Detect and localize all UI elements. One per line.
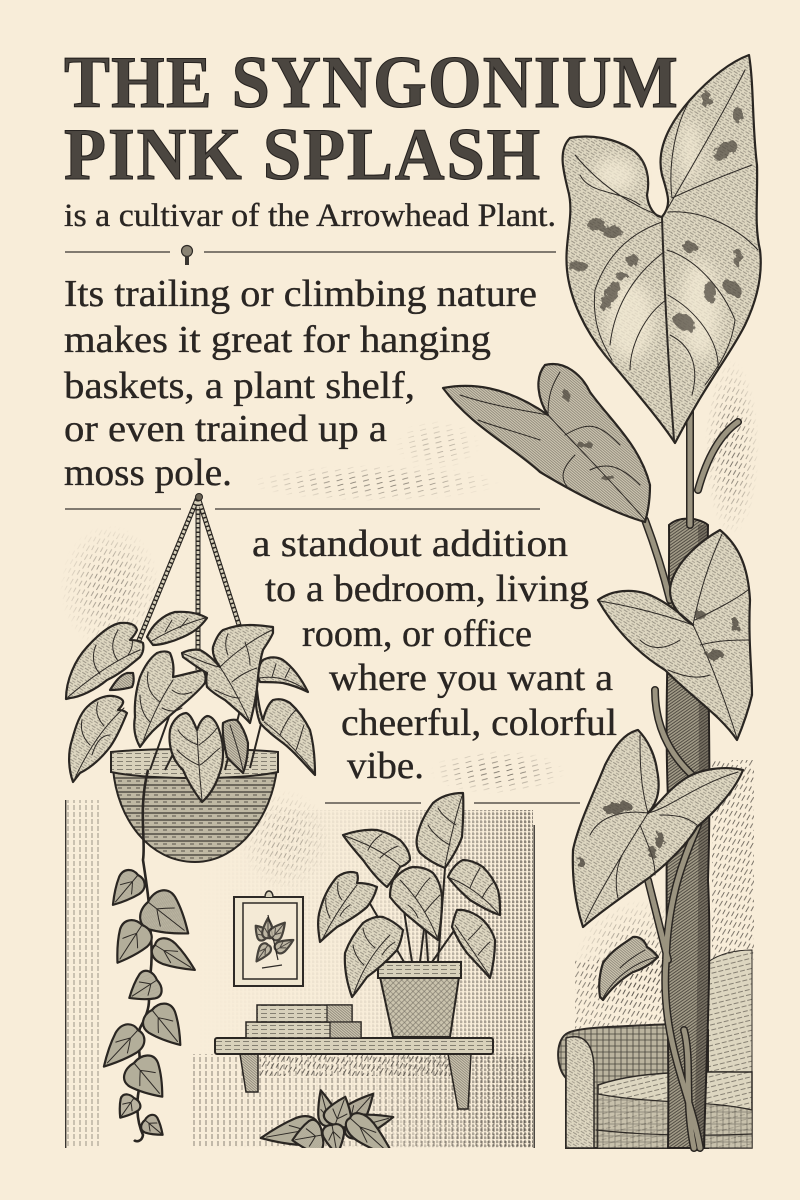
potted plant	[318, 793, 500, 1037]
title: THE SYNGONIUM	[64, 42, 678, 124]
leaf	[110, 673, 134, 690]
wall shelf	[215, 1038, 493, 1109]
potted plant leaves	[318, 793, 500, 997]
leaf	[417, 793, 463, 868]
leaf	[452, 910, 495, 978]
leaf	[134, 652, 206, 747]
stems	[365, 868, 458, 962]
main stem and vines	[645, 410, 738, 1148]
leaf: top large	[563, 55, 761, 443]
pale highlights	[593, 120, 720, 360]
text block: growing habit: or even trained up a	[64, 408, 387, 450]
title: PINK SPLASH	[64, 114, 540, 196]
leaf	[69, 696, 127, 782]
leaf	[256, 690, 315, 775]
text block: where to place it: cheerful, colorful	[341, 702, 617, 744]
terracotta pot	[378, 962, 461, 1037]
title	[64, 42, 678, 196]
leaf	[66, 623, 143, 699]
divider with pin ornament	[65, 246, 556, 265]
leaf	[390, 867, 442, 940]
leaf	[147, 612, 207, 645]
divider	[325, 802, 580, 804]
leaf	[223, 720, 248, 773]
armchair	[558, 950, 752, 1148]
text block: growing habit: Its trailing or climbing nature	[64, 273, 537, 315]
moss pole with climbing plant	[443, 55, 761, 1148]
basket	[111, 749, 278, 862]
text block: where to place it: a standout addition	[252, 523, 568, 565]
divider	[65, 508, 540, 510]
ropes	[135, 494, 240, 670]
leaf: second	[443, 364, 650, 522]
shelf scene wall hatching	[65, 800, 535, 1148]
small plant below shelf	[260, 1089, 394, 1148]
basket leaves	[66, 612, 315, 802]
leaf	[448, 860, 500, 915]
leaf: small lower	[599, 937, 658, 1000]
trailing vine	[134, 770, 152, 1141]
text block: where to place it	[252, 523, 617, 787]
leaf: third	[598, 530, 752, 740]
moss pole	[667, 519, 709, 1148]
text block: where to place it: to a bedroom, living	[265, 568, 589, 610]
stack of books	[246, 1005, 361, 1038]
text block: growing habit: baskets, a plant shelf,	[64, 365, 415, 407]
text block: growing habit: moss pole.	[64, 452, 232, 494]
leaf	[343, 830, 410, 887]
leaf	[258, 657, 308, 692]
hanging basket plant	[66, 494, 315, 1142]
variegated splash spots	[568, 91, 744, 335]
stems inside basket	[150, 700, 262, 770]
leaf: fourth	[573, 730, 743, 927]
text block: growing habit	[64, 273, 537, 494]
text block: growing habit: makes it great for hanging	[64, 319, 491, 361]
pole shadow edge	[694, 525, 709, 1148]
subtitle: is a cultivar of the Arrowhead Plant.	[64, 198, 556, 234]
background hatch patches	[60, 360, 759, 1030]
text block: where to place it: where you want a	[329, 657, 613, 699]
trailing vine leaves	[93, 866, 202, 1142]
leaf	[170, 713, 223, 802]
leaf	[182, 625, 273, 723]
framed botanical print	[234, 891, 303, 986]
text block: where to place it: vibe.	[347, 745, 424, 787]
leaf	[345, 917, 403, 997]
text block: where to place it: room, or office	[302, 613, 532, 655]
leaf	[318, 872, 377, 942]
